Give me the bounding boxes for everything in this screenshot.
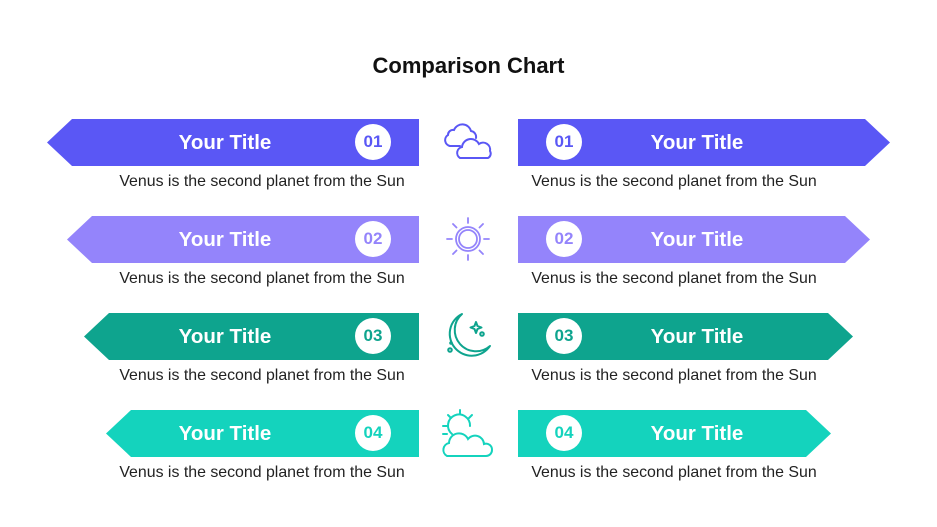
right text 04: Venus is the second planet from the Sun	[531, 464, 817, 481]
right bar 01	[518, 119, 890, 166]
icon: sun	[446, 217, 490, 261]
left text 03: Venus is the second planet from the Sun	[119, 367, 405, 384]
right text 02: Venus is the second planet from the Sun	[531, 270, 817, 287]
icon: clouds	[444, 123, 492, 159]
right bar 02: Your Title	[651, 228, 743, 251]
right text 03: Venus is the second planet from the Sun	[531, 367, 817, 384]
left bar 02	[67, 216, 419, 263]
right bar 02: 02	[555, 229, 573, 248]
left bar 04: Your Title	[179, 422, 271, 445]
right bar 01: 01	[555, 132, 573, 151]
left bar 02: Your Title	[179, 228, 271, 251]
left bar 01: 01	[364, 132, 382, 151]
left bar 01: Your Title	[179, 131, 271, 154]
right bar 02	[518, 216, 870, 263]
left text 02: Venus is the second planet from the Sun	[119, 270, 405, 287]
right text 01: Venus is the second planet from the Sun	[531, 173, 817, 190]
title: Comparison Chart	[373, 53, 564, 78]
right bar 04: Your Title	[651, 422, 743, 445]
right bar 03: 03	[555, 326, 573, 345]
right bar 03: Your Title	[651, 325, 743, 348]
left bar 01	[47, 119, 419, 166]
right bar 03	[518, 313, 853, 360]
left bar 03	[84, 313, 419, 360]
icon: moon	[447, 313, 491, 357]
left bar 02: 02	[364, 229, 382, 248]
left bar 03: Your Title	[179, 325, 271, 348]
left bar 04: 04	[364, 423, 382, 442]
icon: sun behind cloud	[442, 409, 493, 457]
right bar 04	[518, 410, 831, 457]
left text 01: Venus is the second planet from the Sun	[119, 173, 405, 190]
left bar 03: 03	[364, 326, 382, 345]
left text 04: Venus is the second planet from the Sun	[119, 464, 405, 481]
left bar 04	[106, 410, 419, 457]
right bar 01: Your Title	[651, 131, 743, 154]
right bar 04: 04	[555, 423, 573, 442]
